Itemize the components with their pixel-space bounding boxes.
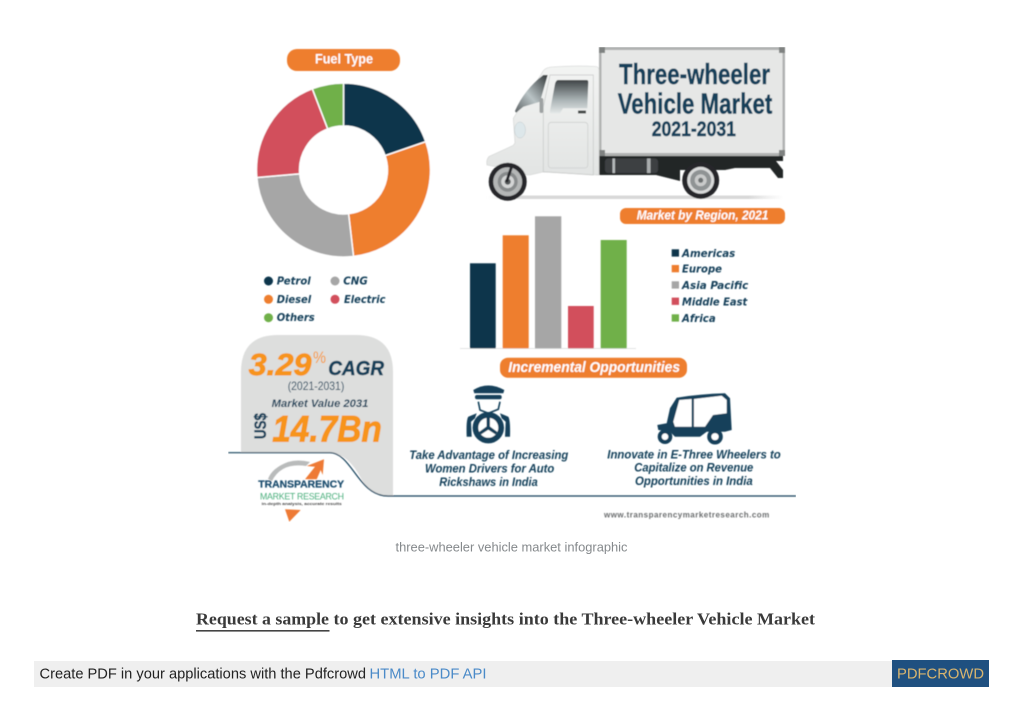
bar chart: market by region — [460, 216, 636, 349]
icon: electric auto rickshaw — [657, 393, 732, 445]
footer bar — [34, 660, 989, 687]
currency: US$ — [252, 413, 270, 439]
footer bar: HTML to PDF API — [370, 666, 486, 682]
cab — [487, 66, 599, 175]
legend: fuel type: Petrol — [277, 276, 311, 288]
front wheel — [489, 163, 527, 201]
text: e-three wheelers: Innovate in E-Three Wheelers to — [607, 447, 781, 461]
divider line — [228, 453, 796, 496]
call to action — [196, 610, 815, 632]
market value label: Market Value 2031 — [272, 398, 368, 410]
title: Three-wheeler — [619, 59, 770, 91]
logo lower triangle — [285, 509, 301, 522]
text: e-three wheelers — [607, 447, 781, 488]
heading: incremental opportunities: Incremental Opportunities — [508, 360, 680, 376]
text: women drivers: Take Advantage of Increasing — [409, 448, 569, 462]
CAGR figure: % — [313, 348, 326, 367]
door handle — [578, 110, 586, 114]
legend: market by region — [672, 248, 749, 325]
rear wheel — [682, 162, 719, 199]
legend: market by region: Asia Pacific — [681, 280, 749, 292]
panel background — [241, 335, 393, 496]
market value figure: 14.7Bn — [272, 409, 382, 450]
footer bar: Create PDF in your applications with the Pdfcrowd — [40, 666, 366, 682]
legend: fuel type: Electric — [344, 294, 386, 306]
period: (2021-2031) — [288, 379, 344, 393]
ground shadow — [487, 196, 784, 199]
title: 2021-2031 — [652, 118, 736, 141]
logo: transparency market research — [258, 459, 344, 522]
legend: market by region: Middle East — [682, 296, 748, 308]
logo: transparency market research: TRANSPARENCY — [258, 479, 344, 491]
CAGR figure: 3.29 — [249, 347, 312, 382]
legend: fuel type: Diesel — [277, 294, 312, 306]
panel: CAGR and market value — [241, 335, 393, 496]
logo arrow — [305, 459, 324, 479]
windshield — [515, 75, 548, 113]
call to action: to get extensive insights into the Three-wheeler Vehicle Market — [334, 610, 815, 628]
title: Vehicle Market — [618, 88, 773, 120]
icon: woman driver — [467, 386, 510, 443]
CAGR figure — [249, 347, 385, 382]
legend: market by region: Africa — [681, 313, 716, 325]
text: women drivers — [409, 448, 569, 489]
mirror — [540, 98, 543, 113]
title — [618, 59, 773, 141]
legend: fuel type: CNG — [343, 276, 368, 288]
headlight — [514, 122, 526, 138]
pdfcrowd button — [892, 660, 989, 687]
heading: fuel type: Fuel Type — [315, 50, 373, 66]
gas tank — [605, 158, 658, 173]
legend: fuel type — [264, 276, 386, 324]
call to action: Request a sample — [196, 610, 329, 628]
text: women drivers: Women Drivers for Auto — [425, 462, 554, 476]
logo: transparency market research: in-depth analysis, accurate results — [262, 501, 343, 506]
heading: fuel type — [287, 49, 400, 71]
legend: market by region: Europe — [682, 264, 722, 276]
illustration: three-wheeler truck — [487, 47, 785, 201]
infographic — [228, 47, 796, 522]
logo: transparency market research: MARKET RESEARCH — [260, 491, 344, 501]
cargo box — [599, 47, 785, 156]
door window — [550, 80, 588, 113]
CAGR figure: CAGR — [328, 358, 385, 380]
logo arc — [268, 460, 310, 481]
door panel — [548, 122, 588, 168]
heading: market by region: Market by Region, 2021 — [637, 208, 768, 222]
text: e-three wheelers: Opportunities in India — [635, 474, 753, 488]
legend: market by region: Americas — [681, 248, 735, 260]
door outline — [543, 75, 593, 175]
legend: fuel type: Others — [277, 312, 315, 324]
text: women drivers: Rickshaws in India — [439, 475, 538, 489]
donut chart: fuel type — [256, 83, 431, 257]
text: e-three wheelers: Capitalize on Revenue — [634, 461, 754, 475]
website url: www.transparencymarketresearch.com — [603, 510, 769, 520]
pdfcrowd button: PDFCROWD — [897, 666, 984, 682]
caption: three-wheeler vehicle market infographic — [396, 540, 628, 554]
chassis — [596, 156, 783, 181]
